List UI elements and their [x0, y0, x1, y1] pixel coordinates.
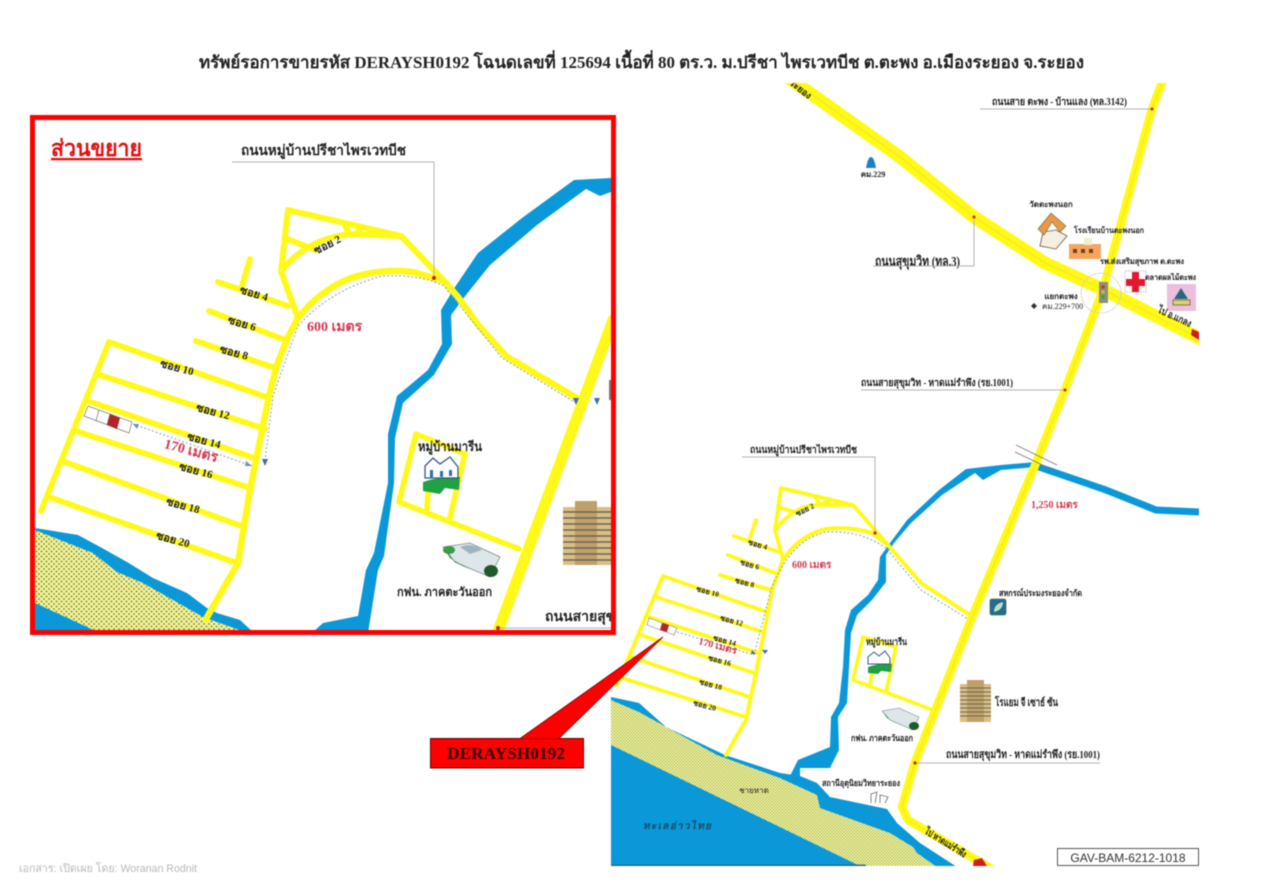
soi labels: ซอย 16: [178, 461, 214, 481]
panel heading: ส่วนขยาย: [51, 136, 142, 161]
soi labels: ซอย 6: [226, 314, 258, 334]
icon: km 229 marker: [861, 157, 885, 179]
icon: school: [1069, 238, 1101, 259]
temple label: วัดตะพงนอก: [1029, 200, 1073, 209]
soi labels: ซอย 14: [712, 633, 737, 648]
plot: [84, 406, 132, 433]
village label: หมู่บ้านมารีน: [866, 636, 907, 649]
soi labels: ซอย 4: [238, 284, 270, 304]
hotel label: โรแยม จี เซาธ์ ซัน: [994, 695, 1058, 709]
distance line: [754, 532, 968, 655]
distance arrow: [133, 398, 600, 466]
river: [790, 462, 1199, 777]
soi labels: ซอย 20: [155, 530, 191, 550]
road label: village road: ถนนหมู่บ้านปรีชาไพรเวทบีช: [750, 443, 857, 457]
weather station label: สถานีอุตุนิยมวิทยาระยอง: [822, 778, 900, 789]
destination label: Klaeng: ไป อ.แกลง: [1155, 303, 1194, 330]
distance label 1,250 m: 1,250 เมตร: [1031, 500, 1079, 511]
icon: red cross: [1125, 271, 1146, 292]
soi labels: ซอย 12: [719, 613, 744, 628]
soi labels: ซอย 18: [165, 496, 201, 516]
icon: traffic light junction: [1081, 273, 1121, 313]
soi labels: ซอย 14: [186, 431, 222, 451]
building label: กฟน. ภาคตะวันออก: [851, 733, 913, 743]
main road: [902, 80, 1163, 869]
small edge marker: [609, 380, 612, 400]
road label: village road: [232, 141, 436, 280]
market label: ตลาดผลไม้ตะพง: [1145, 272, 1196, 282]
soi labels: [692, 501, 816, 713]
soi labels: ซอย 6: [739, 558, 761, 572]
building label: กฟน. ภาคตะวันออก: [397, 585, 492, 599]
distance arrow: [677, 632, 768, 655]
road label: highway: [496, 610, 615, 630]
beach and sea: [611, 697, 957, 867]
icon: condo tower: [563, 501, 611, 565]
cooperative label: สหกรณ์ประมงระยองจำกัด: [999, 587, 1082, 598]
destination label: Mae Ramphueng beach: ไป หาดแม่รำพึง: [922, 824, 969, 860]
soi labels: ซอย 10: [159, 358, 195, 378]
plot: [647, 618, 677, 635]
road label: Ban Laeng road: ถนนสาย ตะพง - บ้านแลง (ทล.3142): [992, 96, 1127, 108]
soi labels: ซอย 8: [218, 344, 250, 363]
callout: property code: [430, 637, 663, 768]
road label: Mae Ramphueng lower: ถนนสายสุขุมวิท - หาดแม่รำพึง (รย.1001): [946, 748, 1100, 762]
road label: village road: ถนนหมู่บ้านปรีชาไพรเวทบีช: [241, 141, 406, 159]
school label: โรงเรียนบ้านตะพงนอก: [1073, 225, 1144, 235]
code box: [1058, 848, 1198, 866]
road label: village road: [742, 443, 877, 535]
road label: Mae Ramphueng lower: [913, 748, 1100, 765]
village roads: [726, 528, 970, 755]
icon: weather station: [871, 792, 888, 803]
road label: Mae Ramphueng upper: [861, 377, 1066, 392]
river: [312, 178, 611, 633]
soi labels: ซอย 18: [698, 677, 723, 692]
soi labels: ซอย 20: [692, 698, 717, 713]
upper highway: [786, 76, 1205, 341]
beach label: ชายหาด: [739, 786, 769, 795]
sea label: ทะเลอ่าวไทย: [643, 819, 712, 832]
soi labels: ซอย 8: [734, 576, 756, 590]
road label: Sukhumvit: ถนนสุขุมวิท (ทล.3): [875, 254, 960, 270]
bridge: [1015, 445, 1057, 470]
icon: office building: [443, 543, 500, 577]
distance label 170 m: 170 เมตร: [697, 636, 739, 657]
distance line: [265, 276, 576, 461]
icon: condo tower: [960, 680, 991, 722]
road label: Mae Ramphueng upper: ถนนสายสุขุมวิท - หาดแม่รำพึง (รย.1001): [861, 377, 1013, 389]
icon: temple: [1038, 213, 1067, 249]
road label: Sukhumvit: [873, 216, 976, 270]
road label: highway: ถนนสายสุขุ: [545, 610, 615, 625]
icon: house: [868, 651, 892, 674]
code box: GAV-BAM-6212-1018: [1070, 851, 1186, 865]
distance label 600 m: 600 เมตร: [792, 560, 832, 571]
distance label 600 m: 600 เมตร: [307, 320, 363, 335]
icon: house: [423, 457, 460, 494]
village roads: [206, 271, 580, 619]
soi labels: ซอย 2: [794, 501, 816, 518]
soi labels: ซอย 16: [707, 653, 732, 668]
title: ทรัพย์รอการขายรหัส DERAYSH0192 โฉนดเลขที่ 125694 เนื้อที่ 80 ตร.ว. ม.ปรีชา ไพรเวทบีช ต.ตะพง อ.เมืองระยอง จ.ระยอง: [199, 49, 1084, 72]
icon: cooperative: [990, 599, 1006, 615]
soi labels: ซอย 2: [312, 233, 344, 257]
distance label 170 m: 170 เมตร: [162, 437, 220, 466]
junction label: [1030, 294, 1084, 310]
footer source note: เอกสาร: เปิดเผย โดย: Woranan Rodnit: [19, 861, 197, 875]
main road: [497, 320, 613, 634]
beach and sea: [35, 528, 254, 633]
clinic label: รพ.ส่งเสริมสุขภาพ ต.ตะพง: [1100, 257, 1184, 267]
junction label: แยกตะพง: [1044, 292, 1078, 301]
soi labels: ซอย 12: [195, 402, 231, 422]
soi labels: [155, 233, 344, 550]
icon: km 229 marker: คม.229: [861, 170, 885, 179]
soi labels: ซอย 10: [695, 584, 720, 599]
icon: office building: [882, 708, 919, 730]
callout: property code: DERAYSH0192: [447, 744, 565, 763]
panel: full location map: [611, 76, 1205, 869]
road label: Ban Laeng road: [980, 96, 1154, 110]
soi labels: ซอย 4: [747, 538, 769, 552]
icon: market: [1167, 284, 1196, 311]
panel: enlarged map: [32, 118, 615, 634]
village label: หมู่บ้านมารีน: [418, 439, 482, 455]
road name top: ระยอง: [788, 78, 813, 101]
junction label: คม.229+700: [1042, 302, 1083, 311]
